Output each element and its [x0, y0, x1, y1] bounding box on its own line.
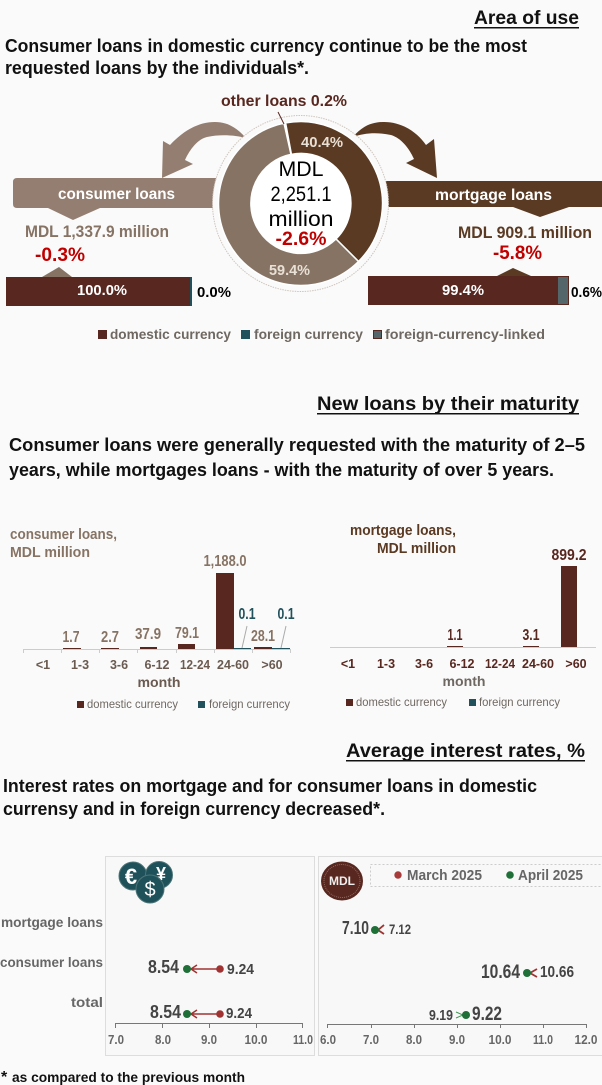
legend: currency types: foreign-currency-linked: [385, 326, 545, 342]
axis: 10.0: [488, 1032, 512, 1047]
icon: currency coins: ¥: [156, 864, 166, 884]
dumbbell: total: 9.24: [226, 1005, 253, 1022]
dumbbell: total: [150, 1002, 253, 1022]
axis: 9.0: [201, 1032, 217, 1047]
dumbbell: consumer loans: [148, 957, 255, 978]
axis labels: 1-3: [377, 657, 395, 671]
axis: 6.0: [320, 1032, 336, 1047]
chart title: MDL million: [10, 544, 90, 561]
chart title: [350, 522, 456, 557]
text block: mortgage amount: [458, 224, 592, 264]
dumbbell: total: 8.54: [150, 1002, 181, 1022]
footnote: as compared to the previous month: [12, 1069, 245, 1085]
dumbbell: total: 9.19: [429, 1008, 453, 1024]
panel: MDL rates: [318, 856, 602, 1056]
axis labels: 6-12: [144, 658, 170, 672]
axis: 10.0: [244, 1032, 268, 1047]
axis: 8.0: [406, 1032, 422, 1047]
axis labels: <1: [341, 657, 355, 671]
value labels: 79.1: [175, 625, 199, 642]
text block: interest rates summary: currensy and in foreign currency decreased*.: [3, 798, 385, 819]
legend: currency types: [98, 326, 545, 342]
row labels: mortgage loans: [1, 914, 103, 930]
axis labels: [36, 658, 283, 672]
panel: consumer loans label: [13, 178, 218, 220]
bar chart: consumer loans by maturity: month: [138, 674, 180, 690]
text block: donut centre total: MDL: [278, 158, 324, 181]
arrow: to mortgage loans: [353, 122, 437, 178]
value labels: 37.9: [135, 626, 161, 643]
chart title: [10, 526, 117, 561]
axis: 11.0: [293, 1032, 313, 1047]
dumbbell: mortgage loans: [342, 918, 411, 938]
text block: mortgage amount: -5.8%: [493, 243, 542, 264]
panel: consumer loans label: consumer loans: [58, 186, 175, 203]
bars: [447, 566, 577, 647]
chart title: mortgage loans,: [350, 522, 456, 539]
icon: currency coins: $: [144, 879, 156, 901]
text block: maturity summary: years, while mortgages loans - with the maturity of over 5 years.: [9, 459, 554, 480]
bar: mortgage loans currency split: 99.4%: [442, 282, 484, 299]
axis labels: 24-60: [217, 658, 249, 672]
row labels: [0, 914, 103, 1010]
bar: consumer loans currency split: 100.0%: [77, 282, 127, 299]
row labels: consumer loans: [0, 954, 103, 970]
dumbbell: consumer loans: [481, 962, 574, 983]
donut chart: loans by area of use: 40.4%: [301, 134, 343, 151]
dumbbell: consumer loans: 10.66: [540, 964, 574, 981]
panel: mortgage loans label: mortgage loans: [435, 187, 552, 204]
legend: foreign currency: [479, 695, 560, 709]
axis: 8.0: [155, 1032, 171, 1047]
dumbbell: consumer loans: 10.64: [481, 962, 520, 983]
bar chart: consumer loans by maturity: [10, 526, 295, 711]
value labels: 1,188.0: [204, 553, 246, 570]
text block: consumer amount: [25, 223, 169, 266]
dumbbell: consumer loans: 9.24: [227, 961, 255, 978]
value labels: 3.1: [522, 627, 540, 644]
icon: MDL badge: [321, 862, 363, 900]
heading: New loans by their maturity: New loans by their maturity: [317, 394, 579, 415]
legend: months: April 2025: [518, 868, 583, 884]
text block: area of use summary: requested loans by the individuals*.: [5, 57, 309, 78]
dumbbell: mortgage loans: 7.10: [342, 918, 369, 938]
donut chart: loans by area of use: [212, 93, 388, 292]
axis labels: 6-12: [449, 657, 475, 671]
arrow: to consumer loans: [162, 122, 246, 178]
text block: area of use summary: Consumer loans in domestic currency continue to be the most: [5, 35, 527, 56]
callout: other loans: other loans 0.2%: [221, 93, 347, 110]
dumbbell: total: [429, 1004, 502, 1025]
axis: 12.0: [574, 1032, 598, 1047]
value labels: 2.7: [101, 629, 119, 646]
text block: donut centre total: [268, 158, 334, 250]
icon: currency coins: [119, 862, 172, 903]
bar: consumer loans currency split: 0.0%: [197, 284, 231, 301]
text block: donut centre total: 2,251.1: [270, 183, 332, 206]
icon: MDL badge: MDL: [329, 874, 355, 888]
icon: currency coins: €: [125, 864, 137, 889]
axis labels: 3-6: [415, 657, 433, 671]
text block: consumer amount: -0.3%: [35, 245, 85, 266]
axis: 9.0: [449, 1032, 465, 1047]
value labels: 28.1: [251, 628, 275, 645]
legend: currency types: domestic currency: [110, 326, 231, 342]
value labels: 1.7: [62, 629, 80, 646]
axis labels: >60: [261, 658, 283, 672]
axis: 11.0: [533, 1032, 553, 1047]
axis: 7.0: [363, 1032, 379, 1047]
text block: donut centre total: million: [268, 208, 334, 231]
chart title: MDL million: [377, 540, 456, 557]
legend: domestic currency: [87, 697, 178, 711]
value labels: [448, 547, 586, 644]
dumbbell: mortgage loans: 7.12: [389, 921, 411, 937]
value labels: 0.1: [238, 606, 256, 623]
text block: interest rates summary: [3, 775, 537, 819]
legend: domestic currency: [356, 695, 447, 709]
heading: Area of use: Area of use: [474, 8, 579, 29]
axis labels: [341, 657, 587, 671]
axis labels: 12-24: [485, 657, 515, 671]
bar: consumer loans currency split: [6, 267, 231, 306]
axis labels: <1: [36, 658, 50, 672]
legend: [77, 697, 290, 711]
donut chart: loans by area of use: 59.4%: [269, 262, 310, 279]
text block: maturity summary: [9, 434, 585, 480]
panel: foreign currency rates: [0, 856, 314, 1056]
text block: maturity summary: Consumer loans were generally requested with the maturity of 2–5: [9, 434, 585, 455]
value labels: 1.1: [448, 627, 463, 644]
legend: foreign currency: [209, 697, 290, 711]
text block: consumer amount: MDL 1,337.9 million: [25, 223, 169, 241]
legend: currency types: foreign currency: [254, 326, 363, 342]
bar chart: mortgage loans by maturity: [330, 522, 596, 709]
text block: mortgage amount: MDL 909.1 million: [458, 224, 592, 242]
axis labels: 24-60: [522, 657, 554, 671]
axis: [320, 1024, 598, 1047]
panel: mortgage loans label: [386, 181, 602, 217]
value labels: [62, 553, 295, 646]
dumbbell: consumer loans: 8.54: [148, 957, 179, 977]
legend: [346, 695, 560, 709]
axis labels: 3-6: [110, 658, 128, 672]
text block: donut centre total: -2.6%: [276, 229, 327, 250]
legend: months: March 2025: [407, 868, 482, 884]
callout: other loans: [221, 93, 347, 124]
bar: mortgage loans currency split: [368, 268, 602, 305]
row labels: total: [71, 994, 103, 1010]
axis: 7.0: [108, 1032, 124, 1047]
heading: Average interest rates: Average interest rates, %: [346, 741, 585, 762]
bar chart: mortgage loans by maturity: month: [442, 673, 486, 689]
axis labels: 1-3: [71, 658, 89, 672]
axis labels: >60: [565, 657, 587, 671]
text block: area of use summary: [5, 35, 527, 78]
text block: interest rates summary: Interest rates on mortgage and for consumer loans in domestic: [3, 775, 537, 796]
bars: [63, 573, 290, 649]
chart title: consumer loans,: [10, 526, 117, 543]
legend: months: [370, 864, 602, 886]
dumbbell: total: 9.22: [472, 1004, 502, 1025]
axis labels: 12-24: [180, 658, 210, 672]
value labels: 0.1: [278, 606, 295, 623]
value labels: 899.2: [552, 547, 586, 564]
axis: [108, 1024, 313, 1047]
